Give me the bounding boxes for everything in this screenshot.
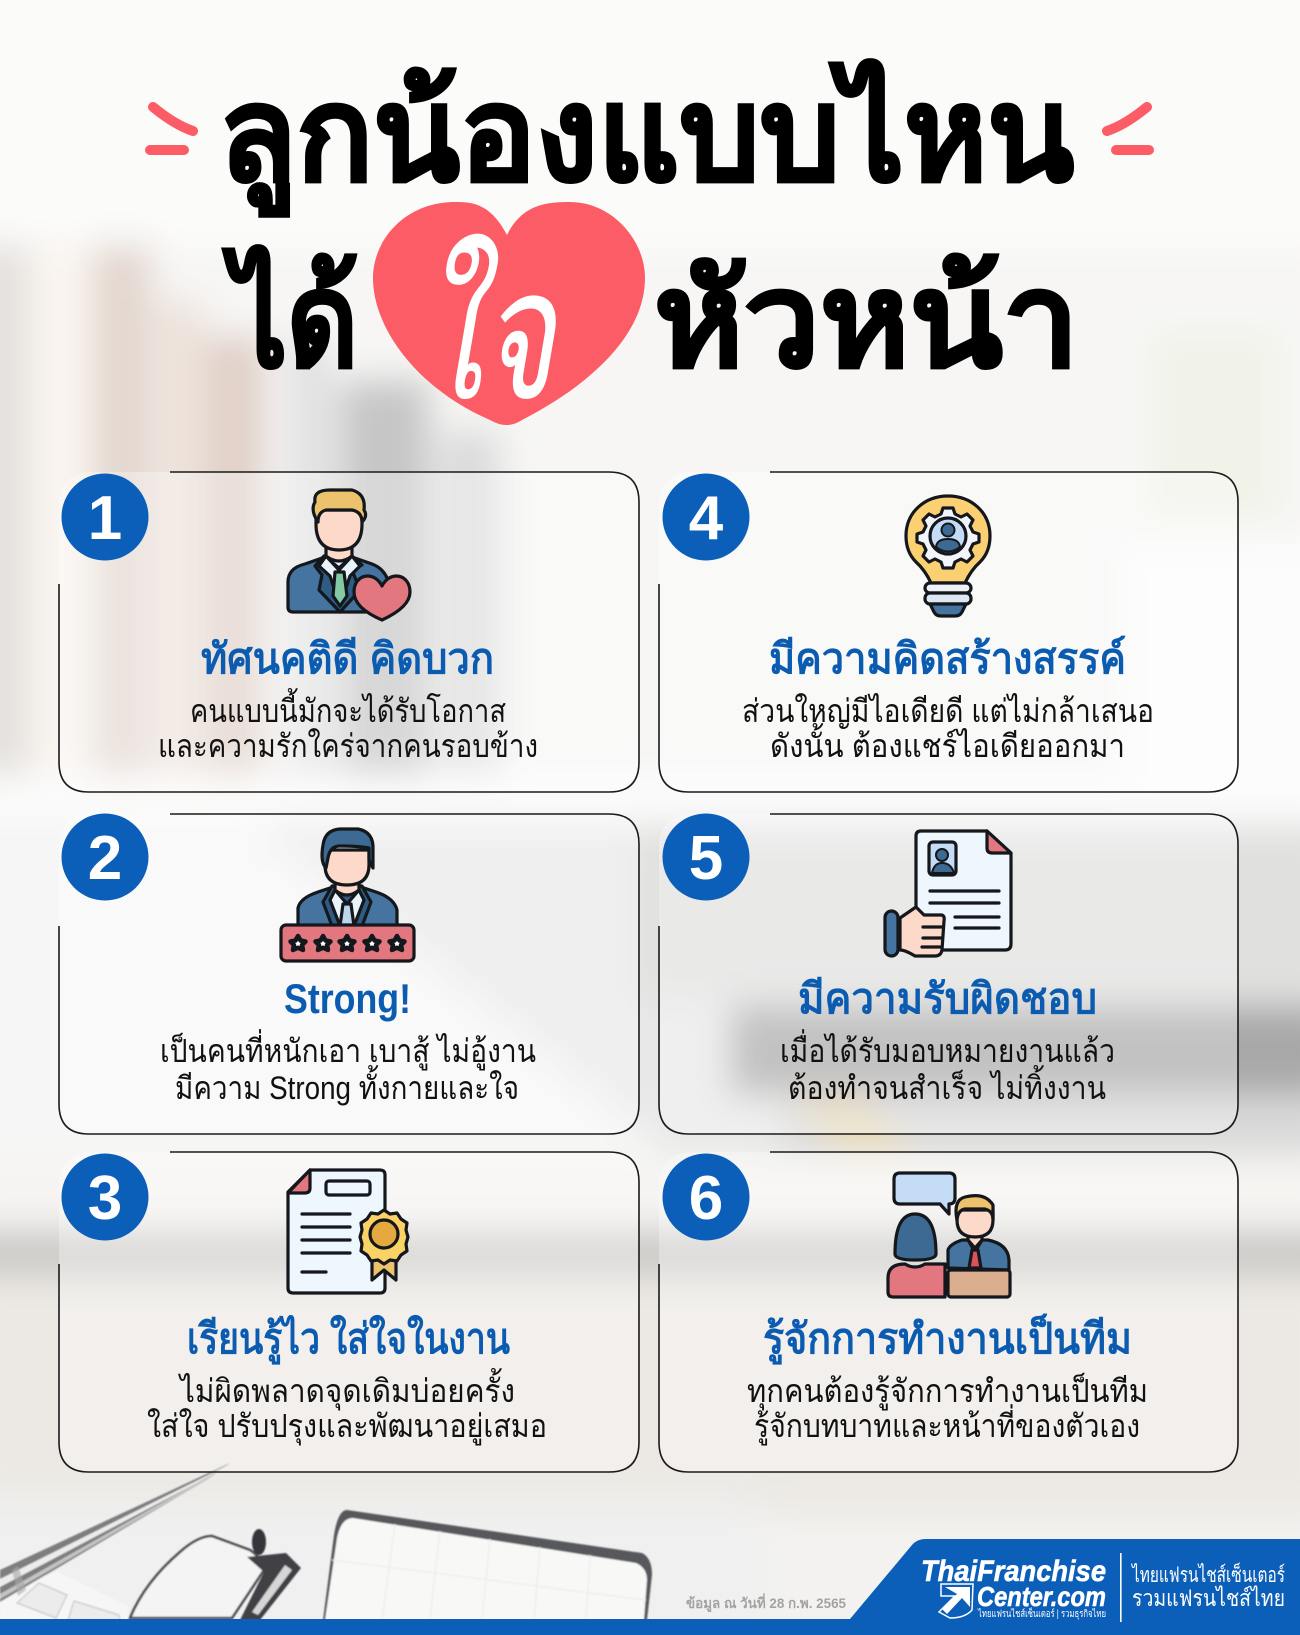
icon: certificate — [288, 1170, 408, 1293]
footer band — [0, 1539, 1300, 1635]
number badge — [62, 1154, 148, 1240]
notebook — [323, 1510, 652, 1620]
sparkle right — [1107, 107, 1149, 150]
body text: รู้จักบทบาทและหน้าที่ของตัวเอง — [754, 1404, 1140, 1446]
number badge — [662, 474, 750, 560]
heading: มีความคิดสร้างสรรค์ — [769, 635, 1126, 682]
number badge: 1 — [88, 484, 122, 553]
logo: Center.com — [977, 1581, 1106, 1612]
card fill — [59, 472, 639, 792]
number badge: 6 — [689, 1164, 723, 1233]
body text — [158, 688, 538, 764]
icon: man with five-star rating — [281, 829, 414, 961]
body text: ต้องทำจนสำเร็จ ไม่ทิ้งงาน — [788, 1065, 1106, 1106]
icon: coral heart with ใจ — [373, 202, 645, 437]
body text: ดังนั้น ต้องแชร์ไอเดียออกมา — [770, 723, 1125, 764]
logo: ThaiFranchise — [921, 1555, 1106, 1588]
logo: ไทยแฟรนไชส์เซ็นเตอร์ | รวมธุรกิจไทย — [977, 1606, 1106, 1620]
number badge — [62, 474, 148, 560]
body text: ทุกคนต้องรู้จักการทำงานเป็นทีม — [747, 1372, 1148, 1411]
number badge: 3 — [88, 1164, 122, 1233]
card outline — [659, 1152, 1238, 1472]
card outline — [59, 472, 639, 792]
glasses — [130, 1529, 301, 1620]
body text — [147, 1368, 547, 1446]
number badge: 2 — [88, 824, 122, 893]
card outline — [59, 814, 639, 1134]
icon: two people talking at desk — [888, 1173, 1010, 1297]
number badge — [62, 814, 148, 900]
panel 6 — [659, 1152, 1238, 1472]
body text: และความรักใคร่จากคนรอบข้าง — [158, 728, 538, 764]
body text: มีความ Strong ทั้งกายและใจ — [175, 1065, 519, 1106]
number badge: 4 — [689, 484, 724, 553]
icon: light bulb with gear — [906, 496, 990, 616]
keyboard — [0, 1572, 128, 1620]
panel 3 — [59, 1152, 639, 1472]
title word: ได้: ได้ — [222, 245, 358, 394]
card fill — [59, 814, 639, 1134]
body text: ไม่ผิดพลาดจุดเดิมบ่อยครั้ง — [177, 1368, 515, 1411]
card fill — [659, 472, 1238, 792]
heading: รู้จักการทำงานเป็นทีม — [763, 1313, 1132, 1365]
card outline — [659, 814, 1238, 1134]
panel 5 — [659, 814, 1238, 1134]
body text: ส่วนใหญ่มีไอเดียดี แต่ไม่กล้าเสนอ — [742, 693, 1154, 729]
divider — [1120, 1553, 1122, 1622]
panel 4 — [659, 472, 1238, 792]
card outline — [59, 1152, 639, 1472]
number badge — [662, 814, 750, 900]
icon: hand holding resume — [885, 831, 1011, 956]
date note: ข้อมูล ณ วันที่ 28 ก.พ. 2565 — [686, 1593, 846, 1612]
card fill — [659, 814, 1238, 1134]
title word: หัวหน้า: หัวหน้า — [654, 247, 1079, 394]
heading: เรียนรู้ไว ใส่ใจในงาน — [187, 1314, 510, 1365]
panel 2 — [59, 814, 639, 1134]
body text — [780, 1029, 1115, 1106]
body text: เมื่อได้รับมอบหมายงานแล้ว — [780, 1029, 1115, 1069]
heading: ทัศนคติดี คิดบวก — [201, 635, 494, 682]
number badge — [662, 1154, 750, 1240]
title line 1: ลูกน้องแบบไหน — [219, 59, 1074, 217]
body text: คนแบบนี้มักจะได้รับโอกาส — [190, 688, 506, 729]
icon: man with heart — [288, 490, 410, 620]
sparkle left — [150, 107, 193, 150]
panel 1 — [59, 472, 639, 792]
desk items: keyboard, pen, glasses, notebook — [0, 1463, 652, 1620]
heading: มีความรับผิดชอบ — [798, 975, 1097, 1022]
title — [219, 59, 1079, 394]
body text — [160, 1029, 536, 1106]
body text: ใส่ใจ ปรับปรุงและพัฒนาอยู่เสมอ — [147, 1408, 547, 1446]
body text: เป็นคนที่หนักเอา เบาสู้ ไม่อู้งาน — [160, 1029, 536, 1071]
logo — [921, 1555, 1106, 1620]
tagline — [1131, 1561, 1285, 1611]
card fill — [59, 1152, 639, 1472]
heading: Strong! — [284, 975, 411, 1022]
card outline — [659, 472, 1238, 792]
card fill — [659, 1152, 1238, 1472]
icon: logo arrow — [939, 1584, 973, 1618]
icon: coral heart with ใจ: ใจ — [420, 232, 559, 437]
number badge: 5 — [689, 824, 723, 893]
body text — [747, 1372, 1148, 1446]
pen — [0, 1463, 230, 1602]
body text — [742, 693, 1154, 764]
